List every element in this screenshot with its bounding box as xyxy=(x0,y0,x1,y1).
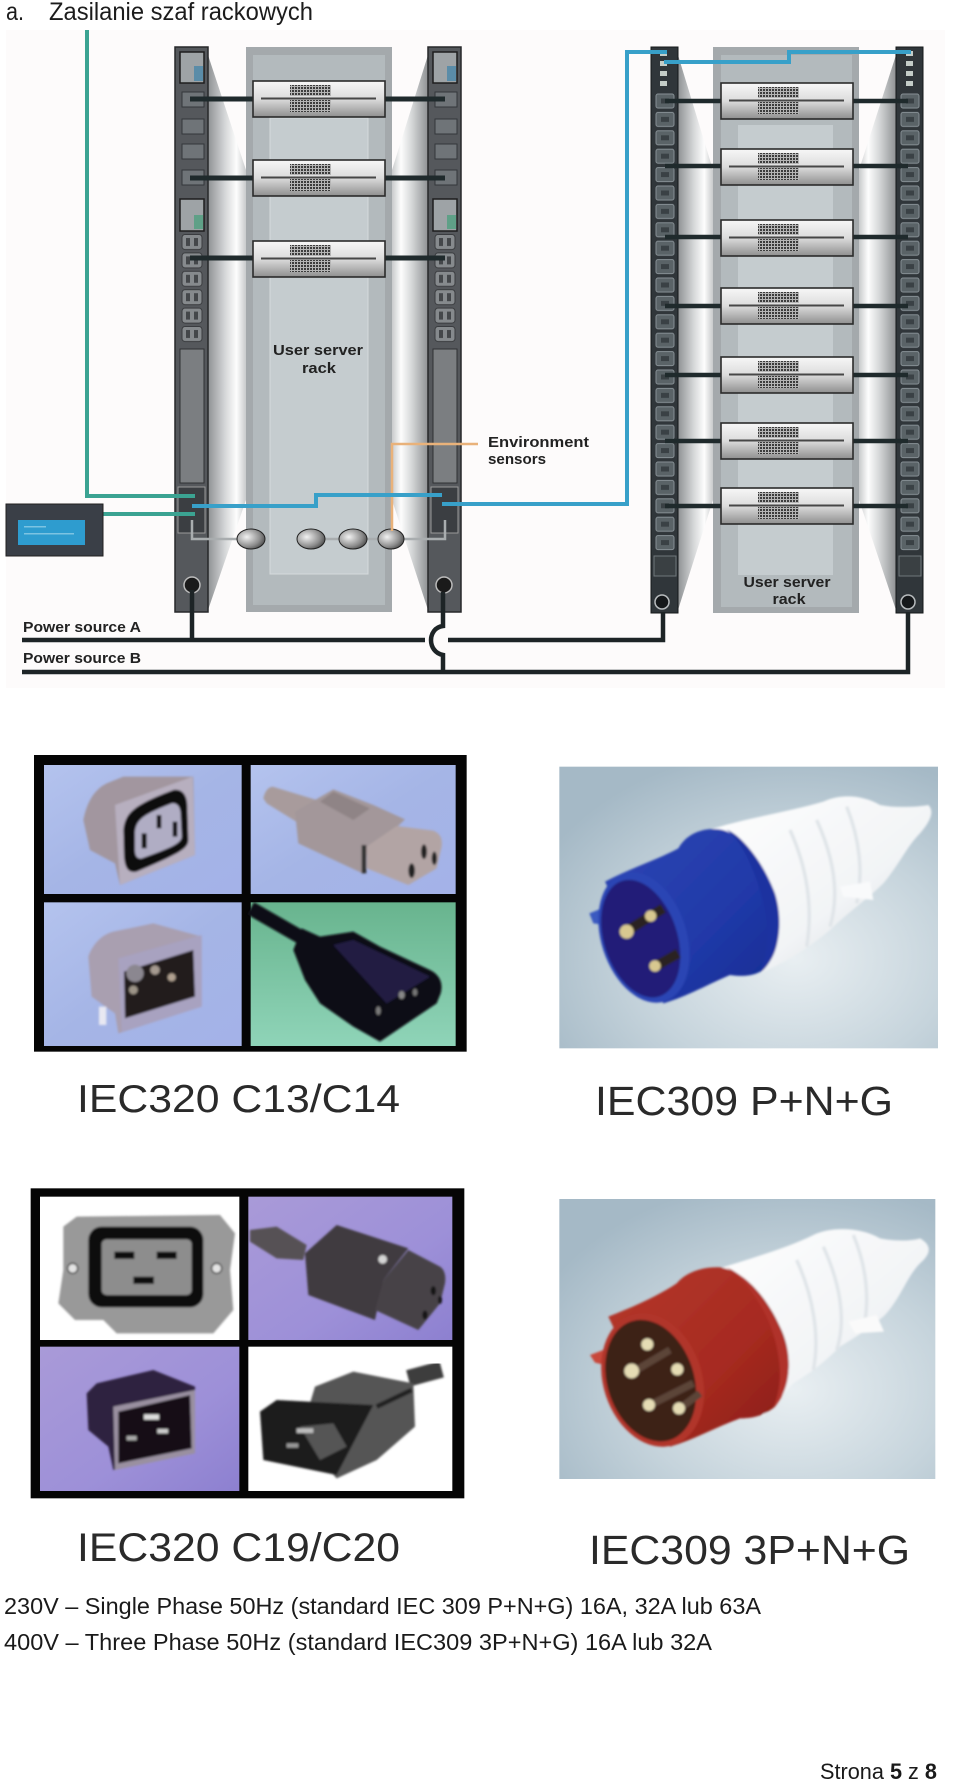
label: user server rack right: User server xyxy=(744,574,831,591)
voltage standards text: 230V – Single Phase 50Hz (standard IEC 309 P+N+G) 16A, 32A lub 63A xyxy=(4,1593,762,1619)
label: IEC309 P+N+G: IEC309 P+N+G xyxy=(595,1078,893,1124)
plug C20 grey xyxy=(260,1369,442,1478)
left PDU A xyxy=(175,47,208,612)
orange sensor leader xyxy=(392,444,478,531)
photo: blue IEC309 plug xyxy=(559,767,938,1048)
photo grid: IEC320 C13/C14 xyxy=(34,755,467,1052)
left server rack xyxy=(208,47,428,612)
label: user server rack left xyxy=(273,342,363,377)
plug C14 black xyxy=(251,908,442,1042)
voltage standards text: 400V – Three Phase 50Hz (standard IEC309 3P+N+G) 16A lub 32A xyxy=(4,1629,713,1655)
label: power source B: Power source B xyxy=(23,650,141,667)
right PDU A xyxy=(651,47,678,613)
label: user server rack right: rack xyxy=(772,591,806,608)
rack power diagram xyxy=(6,30,945,688)
label: user server rack left: User server xyxy=(273,342,363,359)
label: IEC320 C19/C20: IEC320 C19/C20 xyxy=(77,1526,400,1570)
connector C13 with cable xyxy=(263,787,442,885)
inlet C14 panel mount xyxy=(88,923,202,1033)
monitoring display box xyxy=(6,504,103,556)
left rack power cables xyxy=(190,99,445,258)
blue daisy-chain cables xyxy=(192,52,911,506)
socket C19 panel mount xyxy=(58,1215,235,1333)
right rack power cables xyxy=(665,101,908,506)
label: IEC309 3P+N+G: IEC309 3P+N+G xyxy=(589,1527,910,1573)
connector C19 with cable xyxy=(250,1225,445,1330)
photo grid: IEC320 C19/C20 xyxy=(31,1188,464,1498)
label: environment sensors xyxy=(488,434,589,468)
label: user server rack right xyxy=(744,574,831,608)
environment sensors chain xyxy=(192,520,445,549)
right rack servers xyxy=(721,83,853,524)
plug face xyxy=(585,1300,721,1460)
white body xyxy=(710,1229,929,1417)
inlet C20 panel mount xyxy=(87,1370,195,1470)
left rack servers xyxy=(253,81,385,277)
blue collar and nose xyxy=(605,829,779,1003)
voltage standards text xyxy=(4,1593,762,1655)
photo: red IEC309 plug xyxy=(559,1199,935,1479)
right server rack xyxy=(678,47,896,613)
left PDU B xyxy=(428,47,461,612)
socket C13 panel mount xyxy=(83,777,195,885)
label: user server rack left: rack xyxy=(302,360,337,377)
white body xyxy=(703,796,931,972)
label: power source A: Power source A xyxy=(23,619,141,636)
right PDU B xyxy=(896,47,923,613)
power source lines xyxy=(22,590,908,672)
label: IEC320 C13/C14: IEC320 C13/C14 xyxy=(77,1078,400,1121)
label: environment sensors: sensors xyxy=(488,451,546,468)
label: environment sensors: Environment xyxy=(488,434,589,451)
red collar and nose xyxy=(608,1267,789,1447)
plug face xyxy=(583,860,705,1015)
teal network cables xyxy=(87,30,195,514)
